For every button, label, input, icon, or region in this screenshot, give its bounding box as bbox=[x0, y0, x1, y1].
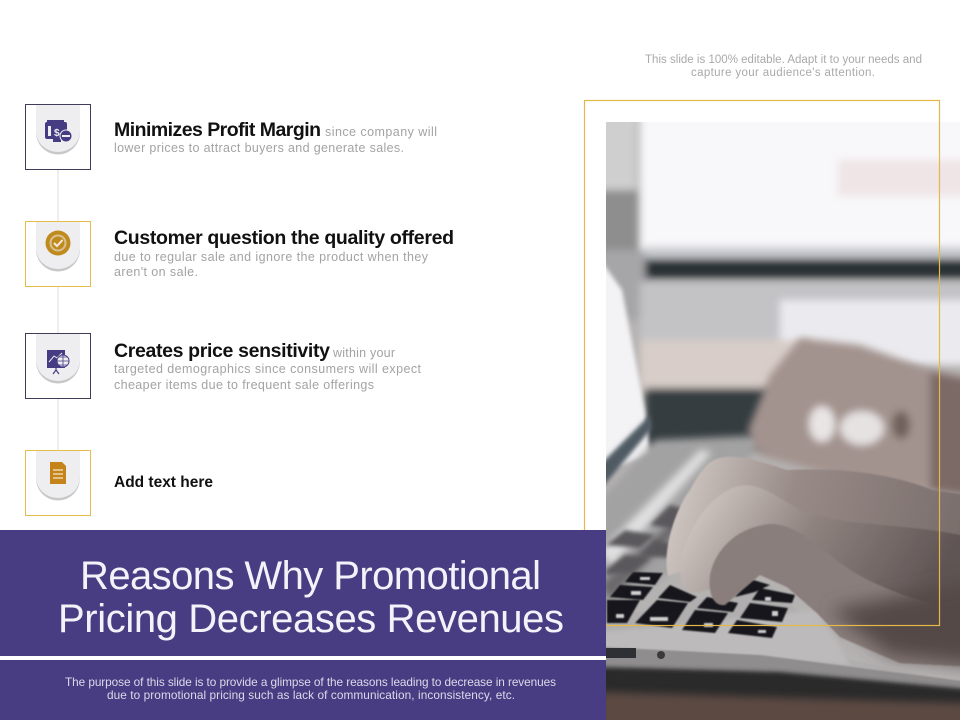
main hand bbox=[667, 457, 960, 668]
keyboard keys bbox=[607, 572, 795, 638]
vertical connector bbox=[57, 170, 59, 450]
item 4: text: Add text here bbox=[114, 474, 213, 491]
title: Pricing Decreases Revenues bbox=[58, 597, 564, 641]
upper hand, blurred bbox=[748, 338, 960, 500]
top note bbox=[645, 54, 922, 79]
item 2: text: due to regular sale and ignore the product when they bbox=[114, 250, 429, 264]
item 4: icon box document bbox=[26, 450, 90, 516]
item 3: text: targeted demographics since consumers will expect bbox=[114, 362, 422, 376]
item 2: text: aren't on sale. bbox=[114, 265, 198, 279]
icon: document bbox=[50, 462, 66, 484]
title bbox=[58, 554, 564, 641]
item 3: text: within your bbox=[332, 346, 395, 360]
item 1: text: since company will bbox=[325, 125, 437, 139]
title panel bbox=[0, 530, 606, 656]
item 3: icon box presentation bbox=[26, 334, 90, 398]
item 2: icon box badge bbox=[26, 222, 90, 286]
photo: hands typing on a laptop bbox=[590, 90, 960, 720]
icon: money with minus: $ bbox=[54, 128, 60, 139]
top note: This slide is 100% editable. Adapt it to your needs and bbox=[645, 54, 922, 66]
icon: quality badge bbox=[46, 230, 70, 256]
item 1: text: Minimizes Profit Margin bbox=[114, 119, 321, 141]
description panel: due to promotional pricing such as lack of communication, inconsistency, etc. bbox=[107, 688, 515, 702]
item 3: text: cheaper items due to frequent sale offerings bbox=[114, 378, 374, 392]
gold outline frame bbox=[584, 100, 940, 626]
title: Reasons Why Promotional bbox=[80, 554, 541, 598]
item 1: icon box money bbox=[26, 104, 90, 170]
item 3: text: Creates price sensitivity bbox=[114, 340, 330, 362]
item 2: text bbox=[114, 227, 454, 279]
description panel bbox=[0, 660, 606, 720]
description panel: The purpose of this slide is to provide a glimpse of the reasons leading to decrease in revenues bbox=[65, 675, 556, 689]
item 3: text bbox=[114, 340, 422, 392]
item 1: text: lower prices to attract buyers and generate sales. bbox=[114, 141, 404, 155]
item 2: text: Customer question the quality offered bbox=[114, 227, 454, 249]
item 1: text bbox=[114, 119, 437, 155]
icon: chart board with globe bbox=[47, 350, 69, 374]
top note: capture your audience's attention. bbox=[691, 67, 875, 79]
laptop body, desk bbox=[600, 585, 960, 720]
